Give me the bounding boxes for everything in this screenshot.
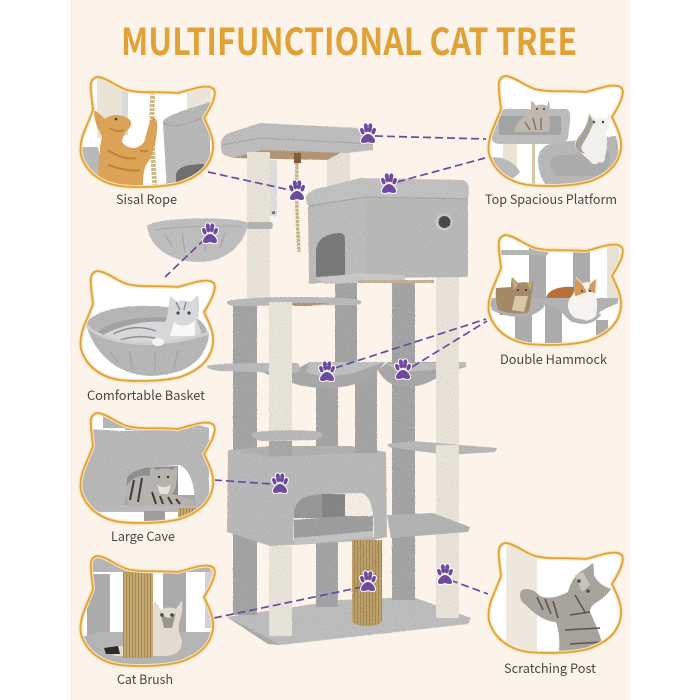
lower cream post bbox=[269, 546, 292, 636]
paw: hammock left bbox=[319, 361, 335, 381]
paw: cat brush bbox=[360, 571, 376, 591]
hanging basket bbox=[147, 218, 248, 262]
paw: large cave bbox=[272, 473, 288, 493]
paw markers bbox=[202, 123, 453, 591]
panel: top spacious platform: Top Spacious Platform bbox=[485, 189, 617, 208]
cream post over shelf bbox=[436, 445, 459, 457]
top left cream post bbox=[247, 150, 270, 298]
panel: comfortable basket: Comfortable Basket bbox=[87, 385, 205, 404]
kitten bbox=[105, 601, 182, 656]
top platform bbox=[221, 123, 373, 160]
panel: cat brush: Cat Brush bbox=[117, 669, 173, 688]
sisal rope bbox=[294, 153, 301, 252]
page background bbox=[70, 0, 630, 700]
upper right shelf bbox=[387, 441, 497, 455]
base front edge bbox=[227, 617, 280, 645]
lower right shelf bbox=[387, 513, 470, 538]
panel: large cave: Large Cave bbox=[111, 526, 175, 545]
base board bbox=[227, 597, 471, 645]
rear cream post bbox=[327, 150, 350, 190]
orange loaf bbox=[546, 287, 574, 298]
paw: sisal rope bbox=[289, 180, 305, 200]
hammock backs bbox=[488, 298, 618, 323]
wall bracket bbox=[270, 160, 277, 216]
climbing tabby bbox=[520, 563, 611, 660]
basket front bbox=[87, 328, 186, 347]
panel: cat brush bbox=[78, 556, 215, 688]
right cream post front segment bbox=[436, 360, 459, 380]
tabby cat on platform bbox=[514, 101, 550, 132]
panel: scratching post: Scratching Post bbox=[504, 658, 596, 677]
grey posts bbox=[233, 280, 415, 615]
panel: comfortable basket bbox=[78, 269, 217, 400]
panel: double hammock bbox=[488, 235, 623, 368]
panel: double hammock: Double Hammock bbox=[500, 349, 608, 368]
upper round shelf bbox=[227, 297, 361, 306]
middle cream post bbox=[269, 302, 292, 452]
middle shelf bbox=[207, 363, 300, 373]
title: MULTIFUNCTIONAL CAT TREE bbox=[121, 12, 577, 66]
bottom cave bbox=[227, 430, 387, 546]
cat tree bbox=[147, 123, 497, 645]
tabby cat bbox=[126, 466, 195, 506]
panel: sisal rope: Sisal Rope bbox=[116, 189, 177, 208]
small round shelf bbox=[252, 430, 322, 456]
paw: top condo bbox=[381, 173, 397, 193]
hanging basket ring bbox=[247, 222, 273, 229]
paw: scratching post bbox=[437, 564, 453, 584]
grey cat bbox=[103, 295, 201, 347]
white orange cat bbox=[568, 277, 597, 323]
white cat bbox=[575, 113, 610, 164]
paw: basket bbox=[202, 223, 218, 243]
cat brush bbox=[352, 540, 382, 626]
orange cat bbox=[94, 110, 157, 190]
basket back bbox=[86, 306, 209, 376]
top condo bbox=[306, 178, 469, 284]
paw: top platform bbox=[360, 123, 376, 143]
leader lines bbox=[165, 136, 488, 618]
panel: large cave bbox=[74, 413, 215, 545]
panel: top spacious platform bbox=[485, 76, 623, 208]
hammock tabby bbox=[496, 277, 533, 315]
hammock two bbox=[378, 362, 466, 387]
hammock front lips bbox=[492, 306, 600, 323]
paw: hammock right bbox=[395, 359, 411, 379]
cream post front of top platform bbox=[247, 152, 270, 192]
hammock one bbox=[262, 362, 385, 388]
panel: scratching post bbox=[488, 543, 623, 677]
panel: sisal rope bbox=[80, 77, 215, 208]
right cream post bbox=[436, 275, 459, 618]
